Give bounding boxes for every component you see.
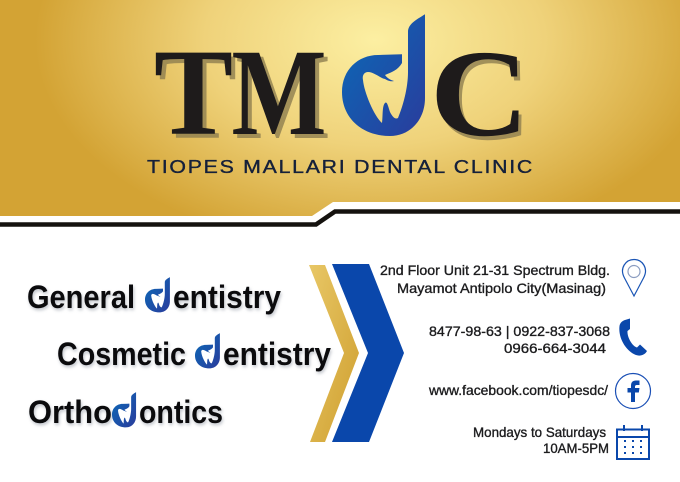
black notched divider line: [0, 212, 680, 224]
logo letter shadows: M: [236, 28, 330, 165]
logo letters T M C: [154, 24, 529, 162]
phone numbers text: [429, 323, 610, 356]
gold header band: [0, 0, 680, 216]
facebook url text: www.facebook.com/tiopesdc/: [428, 382, 608, 398]
service: Cosmetic Dentistry: entistry: [223, 336, 331, 372]
tooth d icon: [195, 333, 220, 368]
address text: [380, 262, 610, 296]
icon: calendar: [617, 425, 649, 459]
logo: TMdC: [154, 14, 532, 166]
service: Orthodontics: [28, 392, 223, 430]
tooth d icon: [145, 277, 170, 312]
phone numbers text: 0966-664-3044: [504, 340, 606, 356]
service: Orthodontics: Ortho: [28, 394, 112, 430]
icon: telephone: [619, 318, 647, 356]
phone numbers text: 8477-98-63 | 0922-837-3068: [429, 323, 610, 339]
icon: location pin: [623, 260, 645, 296]
opening hours text: 10AM-5PM: [543, 440, 609, 456]
logo letter shadows: [158, 28, 532, 166]
logo letter shadows: T: [158, 28, 237, 165]
service: Orthodontics: ontics: [139, 394, 223, 430]
service: Cosmetic Dentistry: Cosmetic: [57, 336, 186, 372]
tooth d icon: [112, 392, 136, 427]
opening hours text: Mondays to Saturdays: [473, 424, 606, 440]
logo letter shadows: C: [433, 29, 532, 166]
icon: facebook: [616, 374, 650, 408]
service: Cosmetic Dentistry: [57, 333, 331, 372]
service: General Dentistry: [27, 277, 281, 315]
logo letters T M C: M: [232, 24, 326, 161]
logo letters T M C: C: [430, 25, 529, 162]
address text: Mayamot Antipolo City(Masinag): [397, 280, 606, 296]
blue chevron arrow: [332, 264, 404, 442]
service: General Dentistry: General: [27, 279, 135, 315]
clinic name: TIOPES MALLARI DENTAL CLINIC: [147, 156, 534, 177]
address text: 2nd Floor Unit 21-31 Spectrum Bldg.: [380, 262, 610, 278]
service: General Dentistry: entistry: [173, 279, 281, 315]
logo icon: tooth letter d: [342, 14, 425, 136]
logo letters T M C: T: [154, 24, 233, 161]
opening hours text: [473, 424, 609, 456]
gold chevron arrow: [309, 265, 359, 442]
